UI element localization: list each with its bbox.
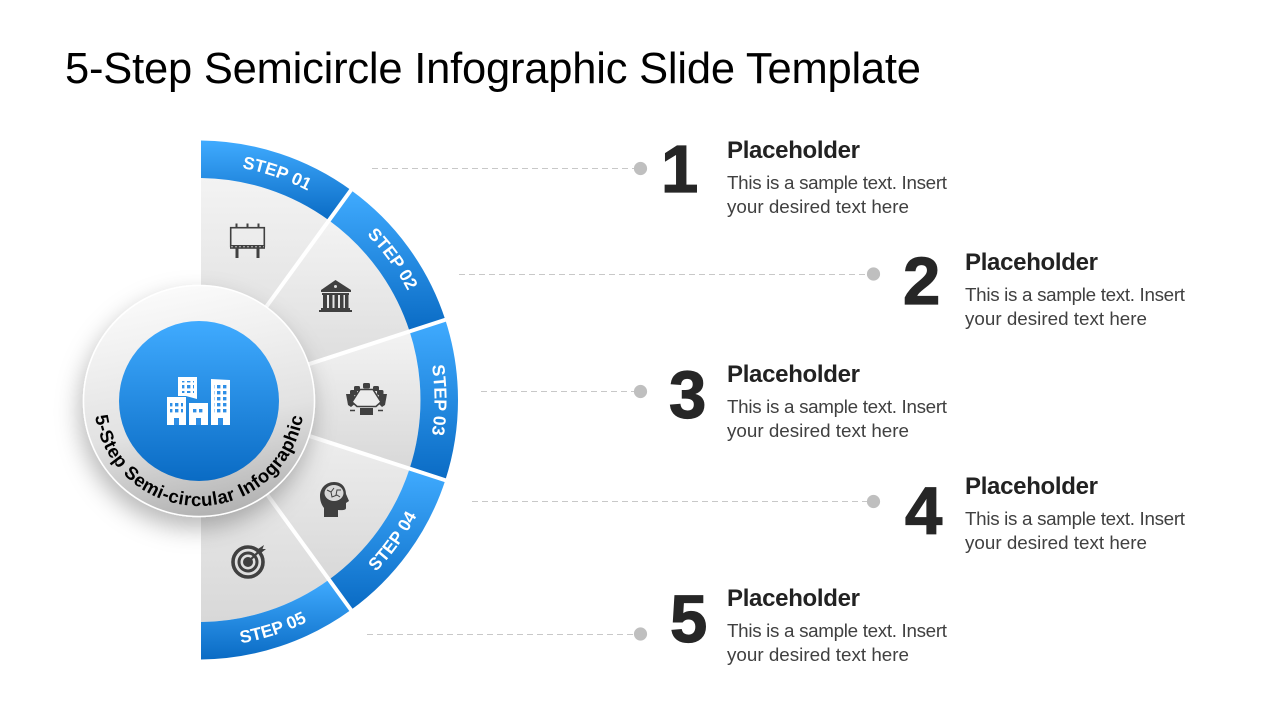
title: 5-Step Semicircle Infographic Slide Template xyxy=(65,45,921,93)
label: step 05: STEP 05 xyxy=(240,612,306,643)
label: step 04: STEP 04 xyxy=(369,511,416,570)
wedge: step 2 xyxy=(198,220,410,400)
label: step 03: STEP 03 xyxy=(432,365,447,435)
semicircle diagram xyxy=(66,140,458,660)
icon: conference table xyxy=(346,383,387,415)
connector 2 xyxy=(459,267,880,281)
icon: head with brain xyxy=(320,482,349,517)
inner blue disc xyxy=(119,321,279,481)
band: step 01 xyxy=(201,140,351,220)
label: step 01: STEP 01 xyxy=(243,157,310,190)
body 2: your desired text here xyxy=(965,308,1147,329)
outer ring xyxy=(84,286,314,516)
body 3: your desired text here xyxy=(727,420,909,441)
wedge: step 1 xyxy=(201,178,329,400)
connector 1 xyxy=(372,162,647,175)
band: step 05 xyxy=(201,580,351,660)
step 5 text xyxy=(670,582,948,665)
heading 2: Placeholder xyxy=(965,249,1098,276)
number 4: 4 xyxy=(905,474,942,549)
number 1: 1 xyxy=(661,132,698,207)
step 3 text xyxy=(669,358,948,441)
body 2: This is a sample text. Insert xyxy=(965,284,1186,305)
step 2 text xyxy=(903,244,1186,329)
step 4 text xyxy=(905,473,1186,553)
connector 4 xyxy=(472,495,880,508)
number 3: 3 xyxy=(669,358,706,433)
body 1: your desired text here xyxy=(727,196,909,217)
step 1 text xyxy=(661,132,948,217)
wedge: step 3 xyxy=(198,331,420,469)
ring caption: 5-Step Semi-circular Infographic xyxy=(96,414,302,506)
icon: target xyxy=(233,545,266,577)
heading 5: Placeholder xyxy=(727,585,860,612)
heading 1: Placeholder xyxy=(727,137,860,164)
body 1: This is a sample text. Insert xyxy=(727,172,948,193)
label: step 02: STEP 02 xyxy=(368,228,417,290)
connector 3 xyxy=(481,385,647,398)
wedge: step 4 xyxy=(198,400,410,580)
center circle xyxy=(66,282,324,542)
icon: buildings xyxy=(167,377,230,425)
body 5: your desired text here xyxy=(727,644,909,665)
band: step 02 xyxy=(329,190,445,331)
body 5: This is a sample text. Insert xyxy=(727,620,948,641)
icon: billboard xyxy=(230,224,265,258)
band: step 04 xyxy=(329,469,445,610)
separators xyxy=(198,188,448,612)
number 5: 5 xyxy=(670,582,707,657)
body 4: This is a sample text. Insert xyxy=(965,508,1186,529)
icon: bank xyxy=(319,280,352,312)
body 3: This is a sample text. Insert xyxy=(727,396,948,417)
number 2: 2 xyxy=(903,244,940,319)
connector 5 xyxy=(367,627,647,641)
body 4: your desired text here xyxy=(965,532,1147,553)
heading 3: Placeholder xyxy=(727,361,860,388)
band: step 03 xyxy=(410,320,458,480)
wedge: step 5 xyxy=(201,400,329,622)
heading 4: Placeholder xyxy=(965,473,1098,500)
